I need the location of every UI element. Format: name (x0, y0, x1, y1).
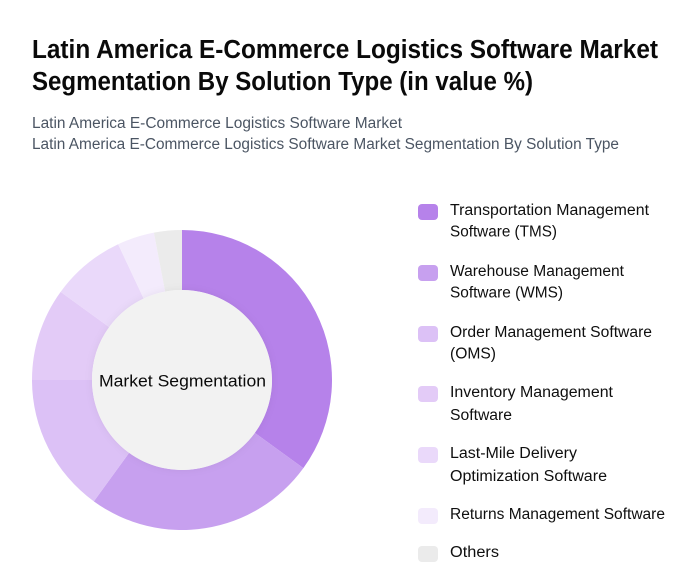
segment: Order Management Software (32, 380, 129, 501)
legend item: Inventory Management Software: Inventory Management (450, 384, 614, 401)
legend item: Order Management Software: (OMS) (450, 346, 496, 362)
legend (418, 202, 665, 562)
legend item: Inventory Management Software (418, 384, 614, 424)
segment: Inventory Management Software (32, 292, 109, 380)
legend item: Warehouse Management Software (418, 263, 625, 302)
subtitle: Latin America E-Commerce Logistics Software Market Segmentation By Solution Type (32, 136, 619, 153)
legend item: Last-Mile Delivery Optimization Software: Optimization Software (450, 468, 607, 485)
legend item: Transportation Management Software: Transportation Management (450, 202, 650, 219)
legend item: Last-Mile Delivery Optimization Software (418, 445, 607, 485)
legend item: Warehouse Management Software: Software (WMS) (450, 284, 563, 302)
subtitle (32, 115, 619, 153)
subtitle: Latin America E-Commerce Logistics Software Market (32, 115, 403, 132)
title: Latin America E-Commerce Logistics Software Market (32, 36, 658, 64)
legend item: Transportation Management Software: Software (TMS) (450, 224, 557, 240)
title (32, 36, 658, 96)
legend item: Returns Management Software: Returns Management Software (450, 506, 665, 523)
center label: Market Segmentation (99, 372, 266, 390)
donut chart (32, 230, 332, 530)
legend item: Others (418, 544, 499, 562)
segment: Returns Management Software (118, 233, 165, 299)
legend item: Transportation Management Software (418, 202, 650, 240)
donut center (92, 290, 272, 470)
legend item: Others: Others (450, 544, 499, 561)
title: Segmentation By Solution Type (in value %) (32, 68, 533, 96)
legend item: Order Management Software (418, 324, 652, 362)
legend item: Last-Mile Delivery Optimization Software: Last-Mile Delivery (450, 445, 577, 462)
legend item: Order Management Software: Order Management Software (450, 324, 652, 341)
segment: Transportation Management Software (182, 230, 332, 468)
legend item: Inventory Management Software: Software (450, 407, 512, 424)
segment: Others (154, 230, 182, 292)
segment: Last-Mile Delivery Optimization Software (61, 244, 144, 327)
legend item: Warehouse Management Software: Warehouse Management (450, 263, 625, 280)
segment: Warehouse Management Software (94, 433, 303, 530)
